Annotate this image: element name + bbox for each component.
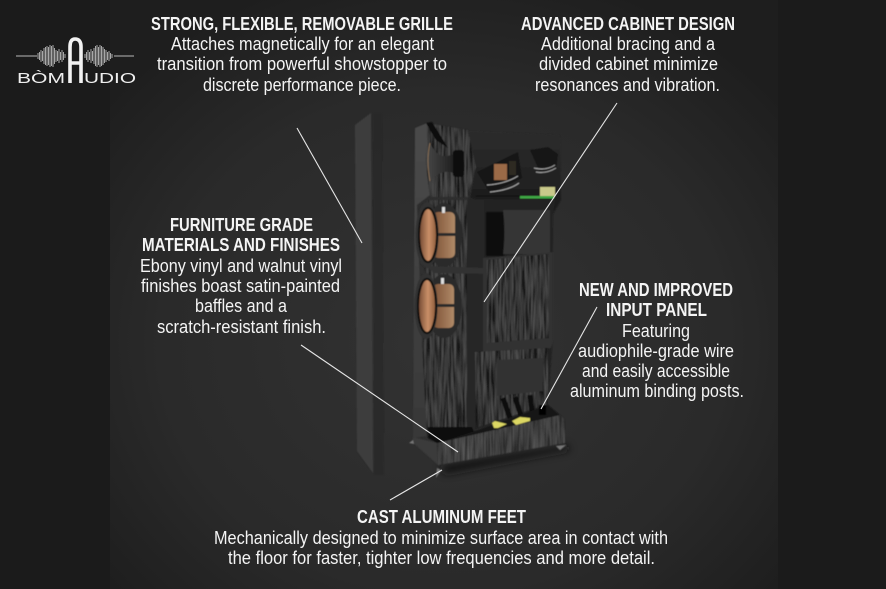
callout: feet: Mechanically designed to minimize surface area in contact with — [214, 528, 668, 548]
woofer 2 — [414, 273, 462, 339]
callout: grille: STRONG, FLEXIBLE, REMOVABLE GRILLE — [151, 14, 453, 34]
wire lugs — [492, 417, 530, 428]
letter A — [70, 39, 81, 83]
floor shadow — [440, 445, 570, 474]
logo — [16, 39, 136, 87]
waveform — [16, 45, 134, 67]
callout: input panel: INPUT PANEL — [606, 300, 707, 320]
wordmark: BÒM — [17, 70, 65, 87]
bottom compartment — [475, 348, 548, 428]
callout: cabinet: ADVANCED CABINET DESIGN — [521, 14, 735, 34]
callout: materials: MATERIALS AND FINISHES — [142, 235, 340, 255]
callout: feet: the floor for faster, tighter low frequencies and more detail. — [228, 548, 655, 568]
woofer 1 — [416, 202, 462, 268]
callout: cabinet — [521, 14, 735, 95]
logo: UDIO — [84, 70, 136, 87]
callout: materials: scratch-resistant finish. — [157, 317, 326, 337]
callout: materials: baffles and a — [195, 296, 288, 316]
callout: grille: Attaches magnetically for an elegant — [171, 34, 434, 54]
callout lines — [297, 103, 617, 500]
callout: input panel: Featuring — [622, 321, 690, 341]
body interior — [422, 198, 555, 443]
callout: grille: transition from powerful showstopper to — [157, 54, 447, 74]
callout: input panel — [570, 280, 744, 401]
tweeter compartment — [426, 123, 476, 197]
callout: input panel: aluminum binding posts. — [570, 381, 744, 401]
speaker cabinet — [409, 122, 570, 478]
callout: materials — [140, 215, 342, 337]
callout: cabinet: divided cabinet minimize — [539, 54, 718, 74]
input box — [497, 358, 543, 396]
grille panel — [355, 113, 384, 475]
callout: input panel: NEW AND IMPROVED — [579, 280, 733, 300]
midrange driver — [477, 147, 558, 193]
aluminum feet — [409, 440, 566, 478]
wires — [503, 395, 532, 418]
binding posts — [539, 405, 546, 415]
callout: input panel: audiophile-grade wire — [578, 341, 734, 361]
tweeter horn — [426, 122, 464, 181]
callout: materials: FURNITURE GRADE — [170, 215, 313, 235]
callout: grille: discrete performance piece. — [203, 75, 401, 95]
lower chamber — [483, 252, 553, 352]
callout: feet — [214, 507, 668, 568]
shelf between woofers — [430, 266, 487, 274]
callout: grille — [151, 14, 453, 95]
cabinet side — [413, 123, 430, 438]
callout: materials: Ebony vinyl and walnut vinyl — [140, 256, 342, 276]
callout: cabinet: resonances and vibration. — [535, 75, 720, 95]
callout: materials: finishes boast satin-painted — [141, 276, 340, 296]
wood back panel — [422, 200, 470, 443]
callout: feet: CAST ALUMINUM FEET — [357, 507, 526, 527]
callout: cabinet: Additional bracing and a — [541, 34, 716, 54]
upper chamber box — [486, 210, 550, 256]
centre brace — [467, 200, 484, 438]
callout: input panel: and easily accessible — [582, 361, 730, 381]
crossover board — [476, 187, 555, 198]
base tray — [412, 405, 565, 465]
mid compartment — [468, 131, 561, 214]
